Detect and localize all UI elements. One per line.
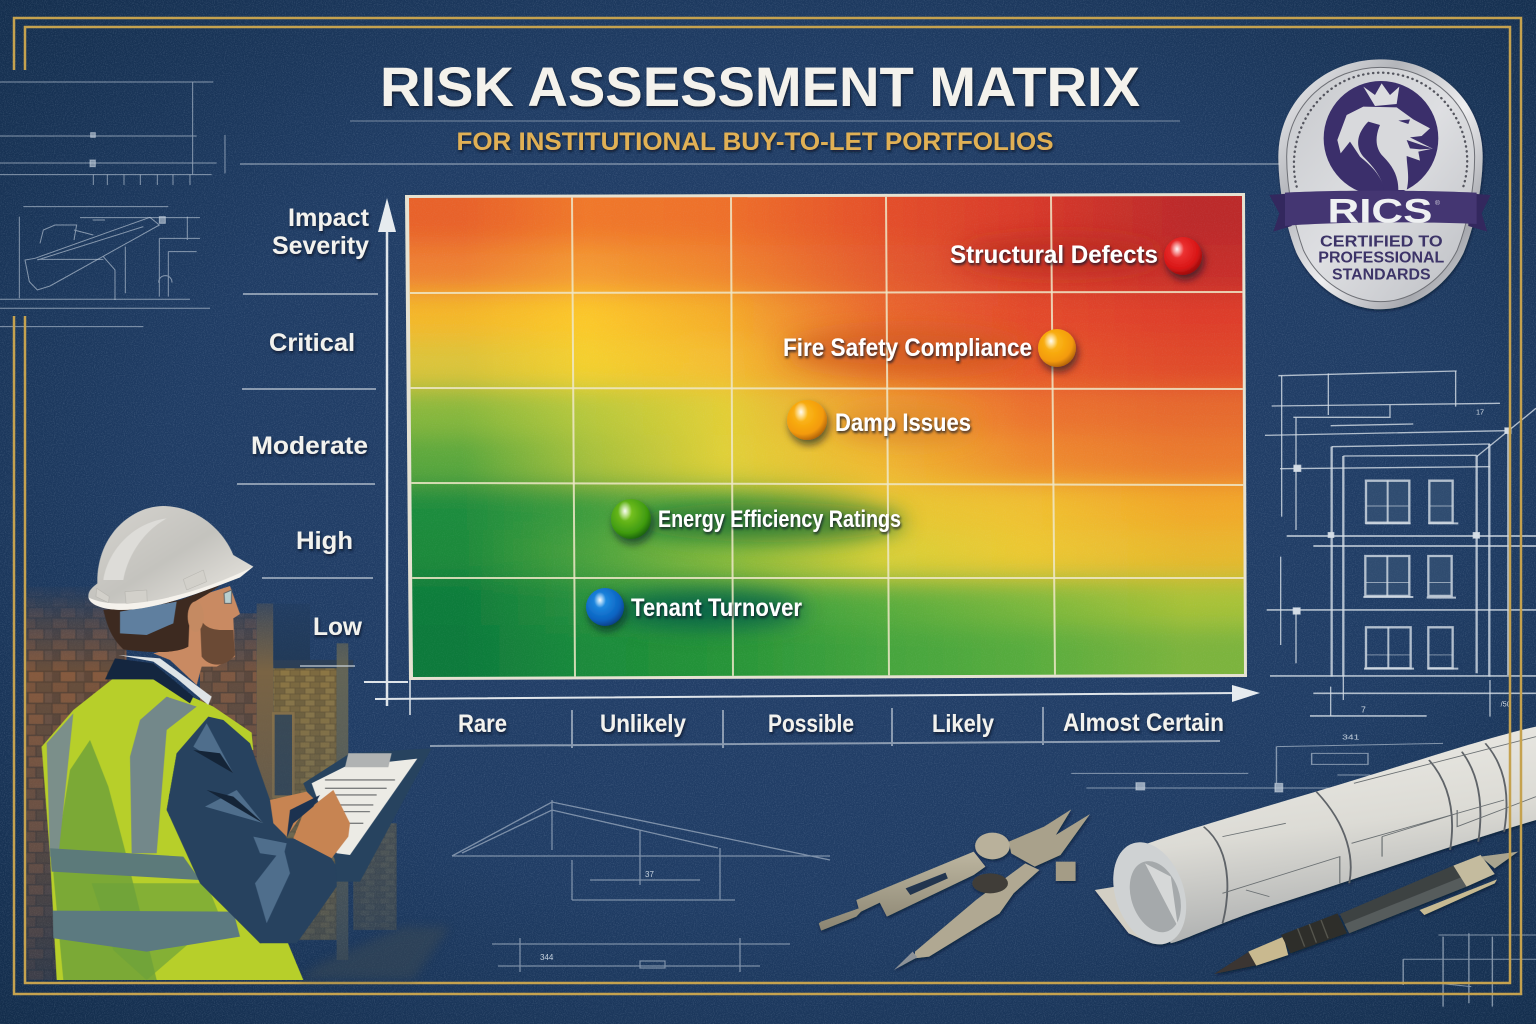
RICS certification badge [1269, 59, 1491, 309]
y axis labels: Moderate [251, 432, 368, 460]
blueprint sketch: right building elevation: 17 [1476, 408, 1484, 417]
street [297, 927, 450, 980]
blueprint sketch: right building elevation: /50 [1501, 700, 1511, 709]
risk point: structural defects [950, 237, 1202, 275]
matrix frame [405, 193, 1247, 680]
risk point: structural defects: Structural Defects [950, 241, 1158, 269]
icon: rolled blueprint [1095, 727, 1536, 948]
blueprint sketch: roof section at bottom: 344 [540, 953, 554, 962]
heat map gradient [409, 196, 1244, 677]
y axis labels: Impact [288, 204, 370, 232]
beard [200, 618, 235, 665]
banner ribbon: RICS [1327, 193, 1432, 231]
x axis labels: Rare [458, 710, 507, 738]
blueprint sketch: right building elevation: 7 [1361, 705, 1366, 715]
title: RISK ASSESSMENT MATRIX [380, 55, 1140, 118]
blueprint sketch: top left [0, 82, 225, 327]
y axis labels: Critical [269, 329, 355, 357]
certification text [1318, 234, 1444, 283]
neck and face [153, 586, 240, 685]
risk point: energy efficiency ratings [611, 499, 901, 539]
lion emblem [1324, 81, 1438, 196]
y axis labels: Severity [272, 232, 369, 260]
label halos [615, 237, 1160, 628]
icon: compass [819, 809, 1090, 970]
y axis labels [251, 204, 370, 641]
x axis labels: Unlikely [600, 710, 686, 738]
hair [103, 585, 220, 652]
blueprint sketch: roof section at bottom [452, 800, 830, 972]
risk point: damp issues [787, 400, 971, 440]
risk point: fire safety compliance [783, 329, 1076, 367]
inspector with brick street [27, 506, 450, 980]
certification text: PROFESSIONAL [1318, 250, 1444, 267]
vest [42, 678, 303, 980]
ear [188, 601, 204, 632]
collar [105, 658, 193, 703]
glasses [224, 590, 232, 603]
y axis arrow [378, 198, 410, 715]
jacket sleeve [167, 717, 337, 943]
risk point: fire safety compliance: Fire Safety Compliance [783, 334, 1032, 362]
blueprint sketch: right building elevation [1265, 371, 1536, 717]
certification text: STANDARDS [1332, 266, 1431, 283]
clipboard [303, 748, 432, 882]
x axis labels: Likely [932, 710, 994, 738]
banner ribbon: ® [1435, 199, 1440, 207]
dotted ring [1294, 73, 1467, 187]
risk point: energy efficiency ratings: Energy Efficiency Ratings [658, 506, 901, 533]
hard hat [88, 506, 253, 635]
risk point: tenant turnover: Tenant Turnover [631, 594, 802, 622]
hands [270, 790, 350, 858]
grid lines [410, 196, 1244, 677]
blueprint roll, compass and pencil [819, 727, 1536, 1007]
blueprint sketch: dimension lines: 341 [1342, 733, 1359, 741]
x axis labels [458, 709, 1224, 738]
y axis labels: Low [313, 613, 363, 641]
certification text: CERTIFIED TO [1320, 234, 1443, 251]
x axis arrow [364, 682, 1260, 702]
risk point: damp issues: Damp Issues [835, 409, 971, 437]
building background [27, 587, 397, 980]
blueprint sketch: roof section at bottom: 37 [645, 870, 654, 879]
risk matrix [405, 193, 1247, 680]
icon: pencil [1214, 852, 1518, 974]
banner ribbon [1269, 191, 1491, 232]
x axis labels: Almost Certain [1063, 709, 1224, 737]
blueprint sketch: dimension lines [1071, 733, 1536, 1007]
risk point: tenant turnover [586, 588, 802, 626]
y axis labels: High [296, 527, 353, 555]
x axis labels: Possible [768, 710, 854, 738]
subtitle: FOR INSTITUTIONAL BUY-TO-LET PORTFOLIOS [456, 128, 1054, 156]
